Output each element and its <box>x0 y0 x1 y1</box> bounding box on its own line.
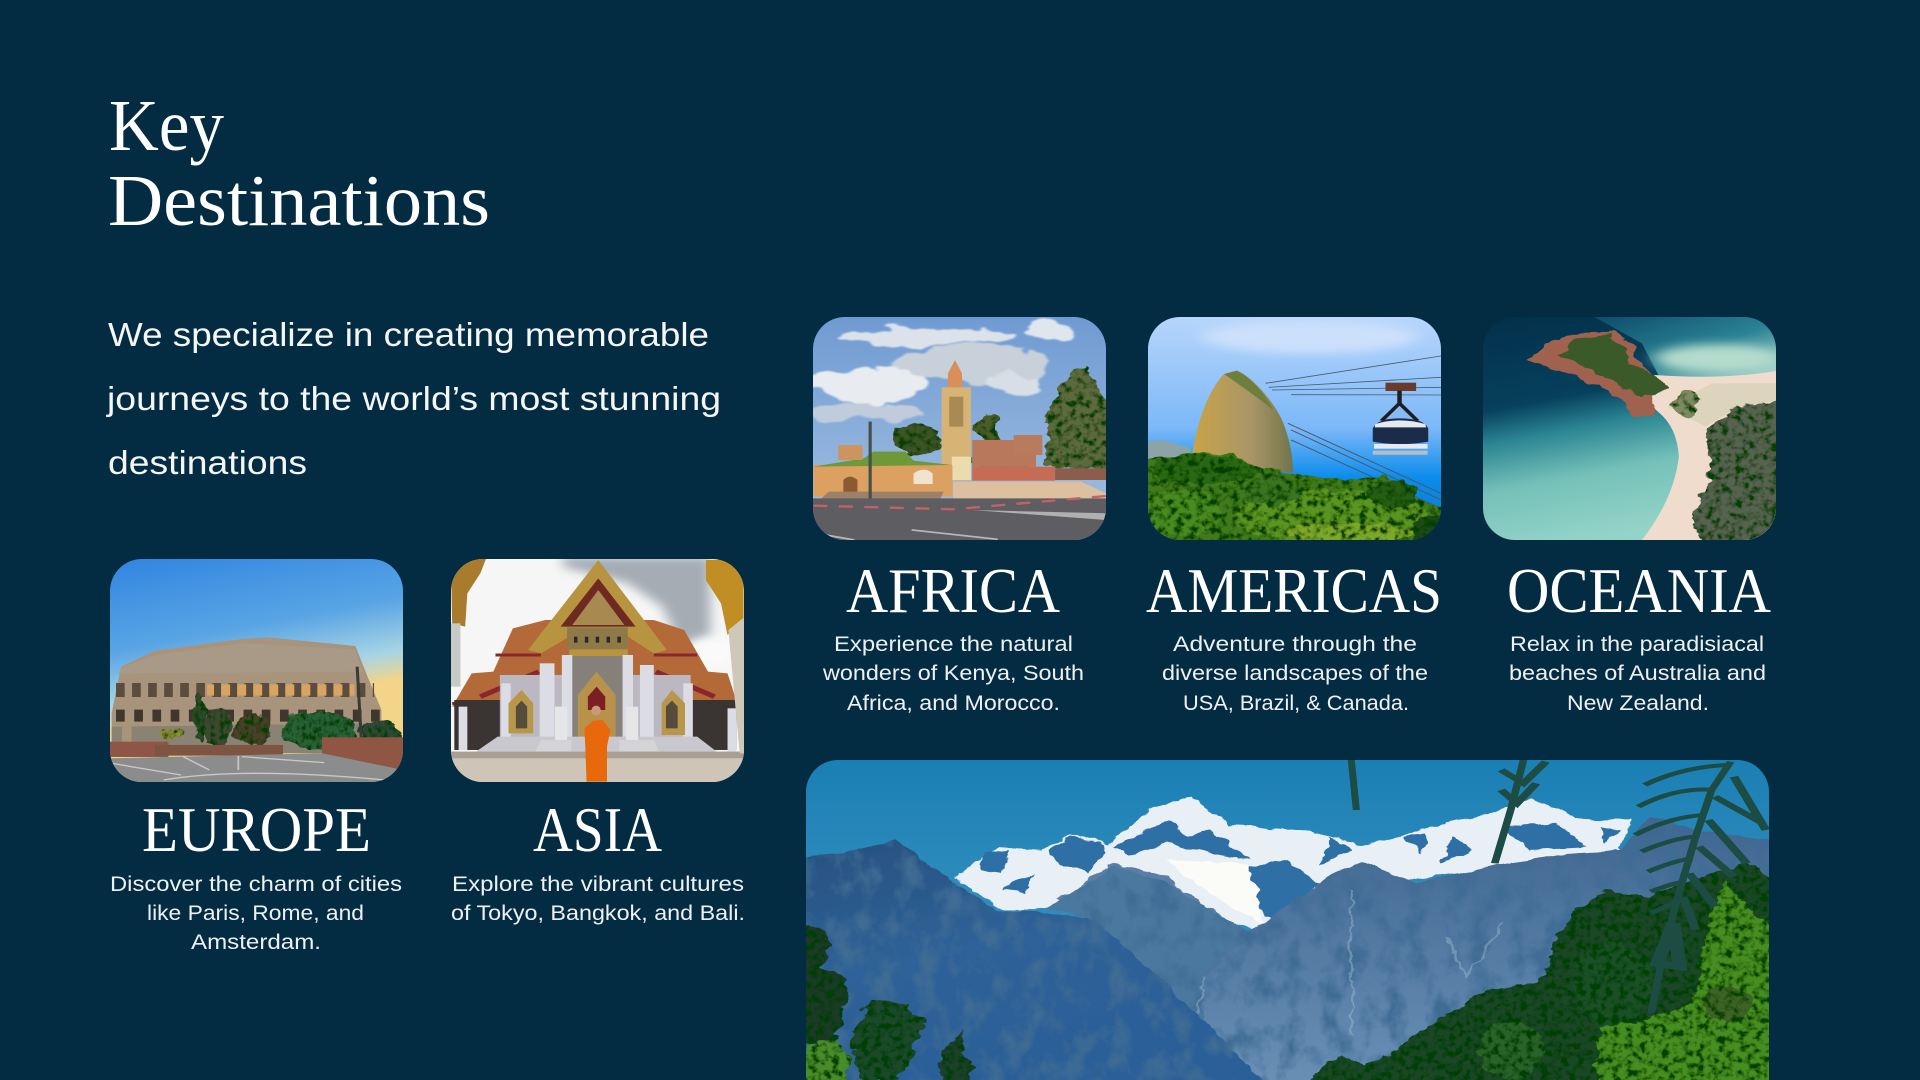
treeline left <box>800 923 972 1080</box>
photo: moroccan minaret <box>810 315 1113 542</box>
gondola <box>1373 383 1428 455</box>
trees <box>892 367 1113 473</box>
photo: thai temple <box>448 557 747 783</box>
monk <box>584 706 610 782</box>
island <box>1530 332 1667 417</box>
region heading: ASIA <box>533 794 662 865</box>
treetops <box>1148 452 1441 540</box>
description: Amsterdam. <box>191 931 321 954</box>
description: wonders of Kenya, South <box>822 662 1084 685</box>
region heading: OCEANIA <box>1507 555 1771 626</box>
description: beaches of Australia and <box>1509 662 1766 685</box>
intro paragraph: We specialize in creating memorable <box>108 316 709 353</box>
title: Destinations <box>108 160 490 241</box>
middle ridge <box>1046 866 1248 1020</box>
right mountain <box>1198 817 1775 1080</box>
land <box>1641 371 1779 542</box>
description <box>451 873 745 925</box>
description: USA, Brazil, & Canada. <box>1183 692 1409 715</box>
description <box>1162 633 1428 715</box>
description: like Paris, Rome, and <box>147 902 364 925</box>
description <box>1509 633 1766 715</box>
building <box>813 445 952 497</box>
photo: sugarloaf cable car <box>1138 315 1451 547</box>
description: Discover the charm of cities <box>110 873 402 896</box>
cables <box>1266 356 1441 508</box>
left mountain <box>800 840 1268 1080</box>
description: of Tokyo, Bangkok, and Bali. <box>451 902 745 925</box>
intro paragraph: destinations <box>108 444 307 481</box>
description: Explore the vibrant cultures <box>452 873 744 896</box>
photo: aerial beach <box>1479 315 1782 543</box>
region heading: EUROPE <box>142 794 371 865</box>
region heading: AMERICAS <box>1146 555 1442 626</box>
description: Adventure through the <box>1173 633 1417 656</box>
fern fronds <box>1351 760 1766 1013</box>
description: diverse landscapes of the <box>1162 662 1428 685</box>
panel: americas <box>1138 315 1451 715</box>
photo: snowy mountains <box>800 758 1775 1080</box>
title <box>108 85 490 241</box>
minaret <box>942 360 971 481</box>
cypress and shrubs <box>159 690 402 749</box>
description: Relax in the paradisiacal <box>1510 633 1764 656</box>
title: Key <box>109 85 224 166</box>
clouds <box>813 318 1081 420</box>
description <box>110 873 402 954</box>
intro paragraph: journeys to the world’s most stunning <box>106 380 721 417</box>
panel: europe <box>107 557 407 954</box>
intro paragraph <box>106 316 721 481</box>
columns <box>459 655 736 752</box>
panel: africa <box>810 315 1113 715</box>
panel: oceania <box>1479 315 1782 715</box>
photo: colosseum <box>107 557 407 783</box>
side roofs <box>452 620 738 707</box>
description: Experience the natural <box>834 633 1073 656</box>
panel: asia <box>448 557 747 925</box>
description <box>822 633 1084 715</box>
sugarloaf rock <box>1192 371 1293 473</box>
treeline right <box>1300 863 1775 1080</box>
description: Africa, and Morocco. <box>847 692 1060 715</box>
snowy peaks <box>953 797 1632 932</box>
region heading: AFRICA <box>846 555 1060 626</box>
gable <box>528 560 667 656</box>
description: New Zealand. <box>1567 692 1709 715</box>
bright foliage <box>1597 880 1775 1080</box>
